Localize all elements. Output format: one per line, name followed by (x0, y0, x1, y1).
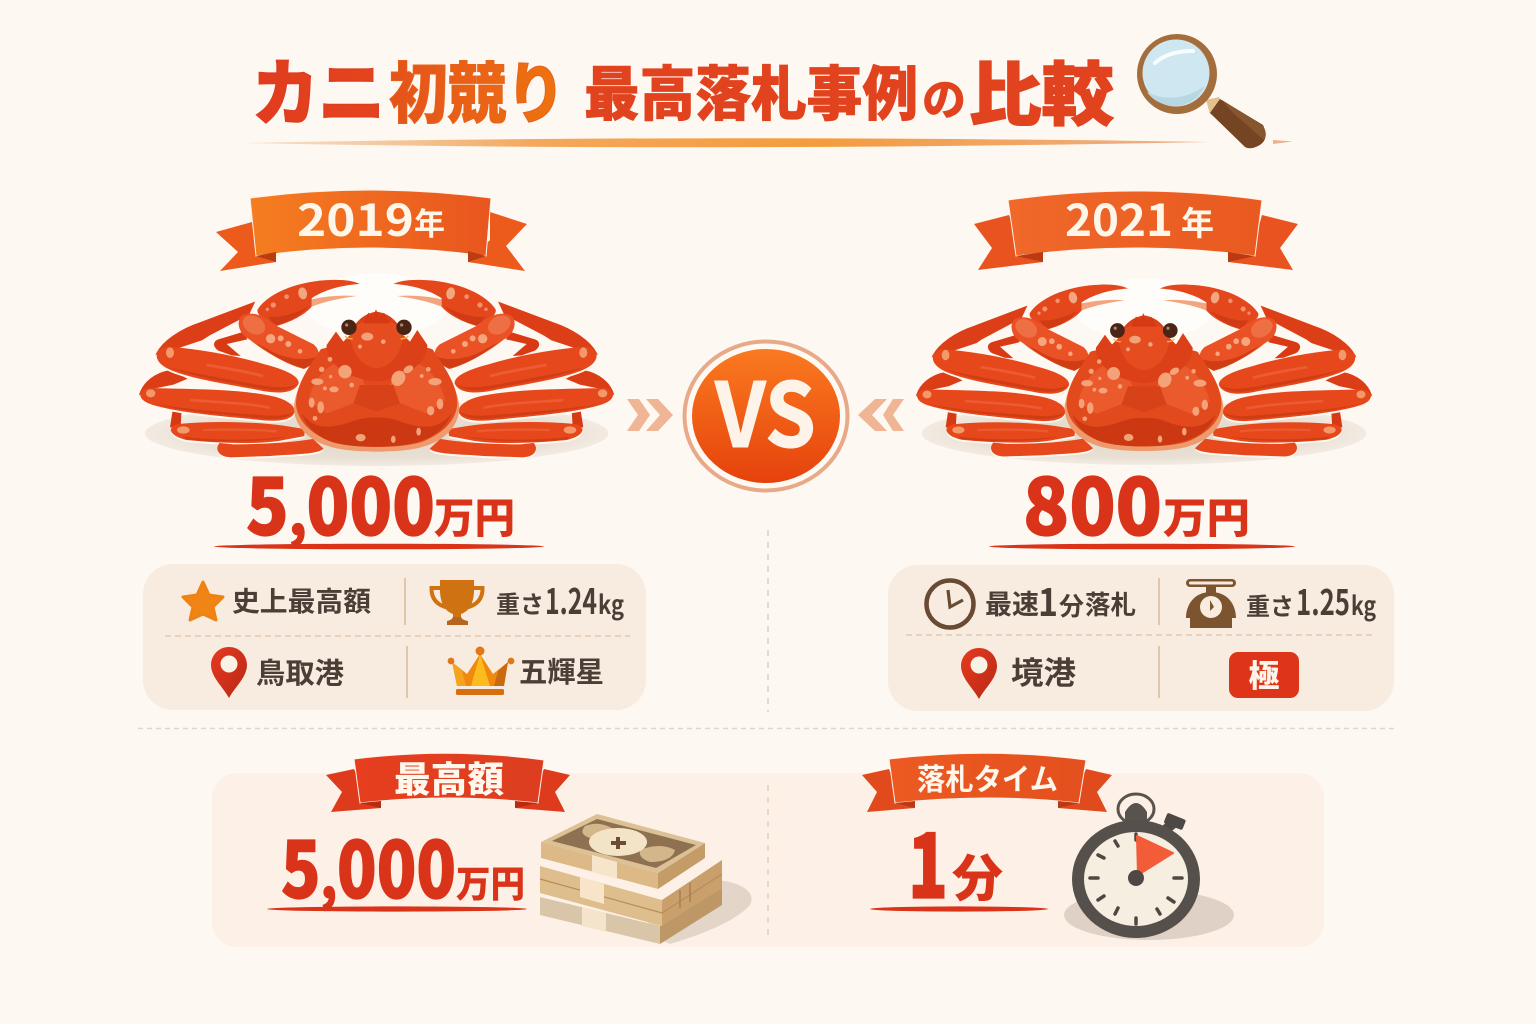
VS badge: VS (714, 344, 816, 473)
price: 5,000万円 (2019): 5,000 (246, 446, 435, 558)
text: 最速1分落札: 最速 (985, 583, 1039, 622)
top bundle (541, 842, 658, 889)
badge: 極 (1229, 651, 1299, 698)
badge: 極: 極 (1248, 651, 1280, 696)
text: 最速1分落札: 分 (1059, 587, 1084, 623)
icon: money stacks (540, 814, 752, 944)
icon: magnifying glass (1137, 34, 1266, 148)
value: 1分: 1 (908, 797, 948, 924)
middle bundle (540, 866, 662, 926)
title (252, 35, 1114, 140)
ribbon: 2019: 2019 (297, 185, 414, 249)
crab illustration: 2021 (917, 278, 1371, 465)
ribbon: 2021: 年 (1181, 197, 1214, 245)
ribbon: 最高額: 最高額 (394, 751, 504, 803)
text: 重さ1.24kg: kg (598, 585, 624, 622)
price: 5,000万円 (2019) (214, 446, 544, 558)
ribbon: 落札タイム: 落札タイム (917, 755, 1058, 799)
value: 1分 (870, 797, 1048, 924)
title: 最高落札事例 (584, 47, 918, 132)
price: 800万円 (2021): 800 (1023, 446, 1162, 558)
title: の (922, 64, 966, 128)
arrows: left chevrons (627, 399, 673, 431)
text: 最速1分落札: 落札 (1085, 585, 1136, 622)
panel: bottom summary (212, 773, 1324, 947)
ribbon: 2019: 年 (414, 199, 445, 244)
price: 800万円 (2021) (989, 446, 1295, 558)
arrows: right chevrons (858, 399, 904, 431)
value: 1分: 分 (952, 839, 1003, 911)
text: 最速1分落札: 1 (1038, 572, 1058, 627)
price: 5,000万円 (2019): 万円 (434, 485, 515, 546)
text: 重さ1.24kg: 1.24 (545, 574, 597, 625)
title underline (240, 138, 1293, 147)
panel: 2021 facts (888, 565, 1394, 711)
text: 重さ1.25kg: kg (1351, 586, 1376, 623)
ribbon: 落札タイム (862, 753, 1112, 812)
value: 5,000万円: 万円 (456, 854, 525, 908)
text: 重さ1.25kg: 1.25 (1296, 575, 1350, 626)
crab illustration: 2019 (140, 273, 613, 466)
ribbon: 最高額 (326, 751, 570, 812)
text: 鳥取港: 鳥取港 (256, 651, 344, 692)
text: 五輝星: 五輝星 (519, 650, 604, 691)
icon: crown (448, 646, 514, 695)
ribbon: 2021: 2021 (1065, 185, 1173, 249)
text: 最速1分落札 (985, 572, 1136, 627)
icon: clock (926, 580, 974, 628)
bottom bundle (540, 897, 660, 944)
text: 境港: 境港 (1011, 648, 1076, 693)
title: 比較 (969, 39, 1114, 139)
icon: star (183, 582, 223, 620)
price: 800万円 (2021): 万円 (1163, 485, 1250, 546)
value: 5,000万円: 5,000 (281, 809, 456, 921)
ribbon: 2019 (216, 185, 527, 271)
section divider (138, 728, 1398, 730)
title: 初競り (389, 41, 565, 137)
icon: trophy (431, 580, 483, 625)
icon: location pin (961, 648, 997, 699)
panel: 2019 facts (143, 564, 646, 710)
text: 重さ1.25kg: 重さ (1246, 587, 1294, 622)
icon: location pin (211, 647, 247, 698)
text: 重さ1.25kg (1246, 575, 1376, 626)
VS badge (684, 342, 848, 490)
title: カニ (252, 35, 385, 140)
icon: kitchen scale (1186, 579, 1236, 628)
icon: stopwatch (1064, 794, 1234, 940)
text: 史上最高額: 史上最高額 (232, 579, 372, 619)
text: 重さ1.24kg: 重さ (496, 585, 544, 620)
text: 重さ1.24kg (496, 574, 624, 625)
center vertical divider (767, 530, 769, 712)
ribbon: 2021 (974, 185, 1298, 270)
